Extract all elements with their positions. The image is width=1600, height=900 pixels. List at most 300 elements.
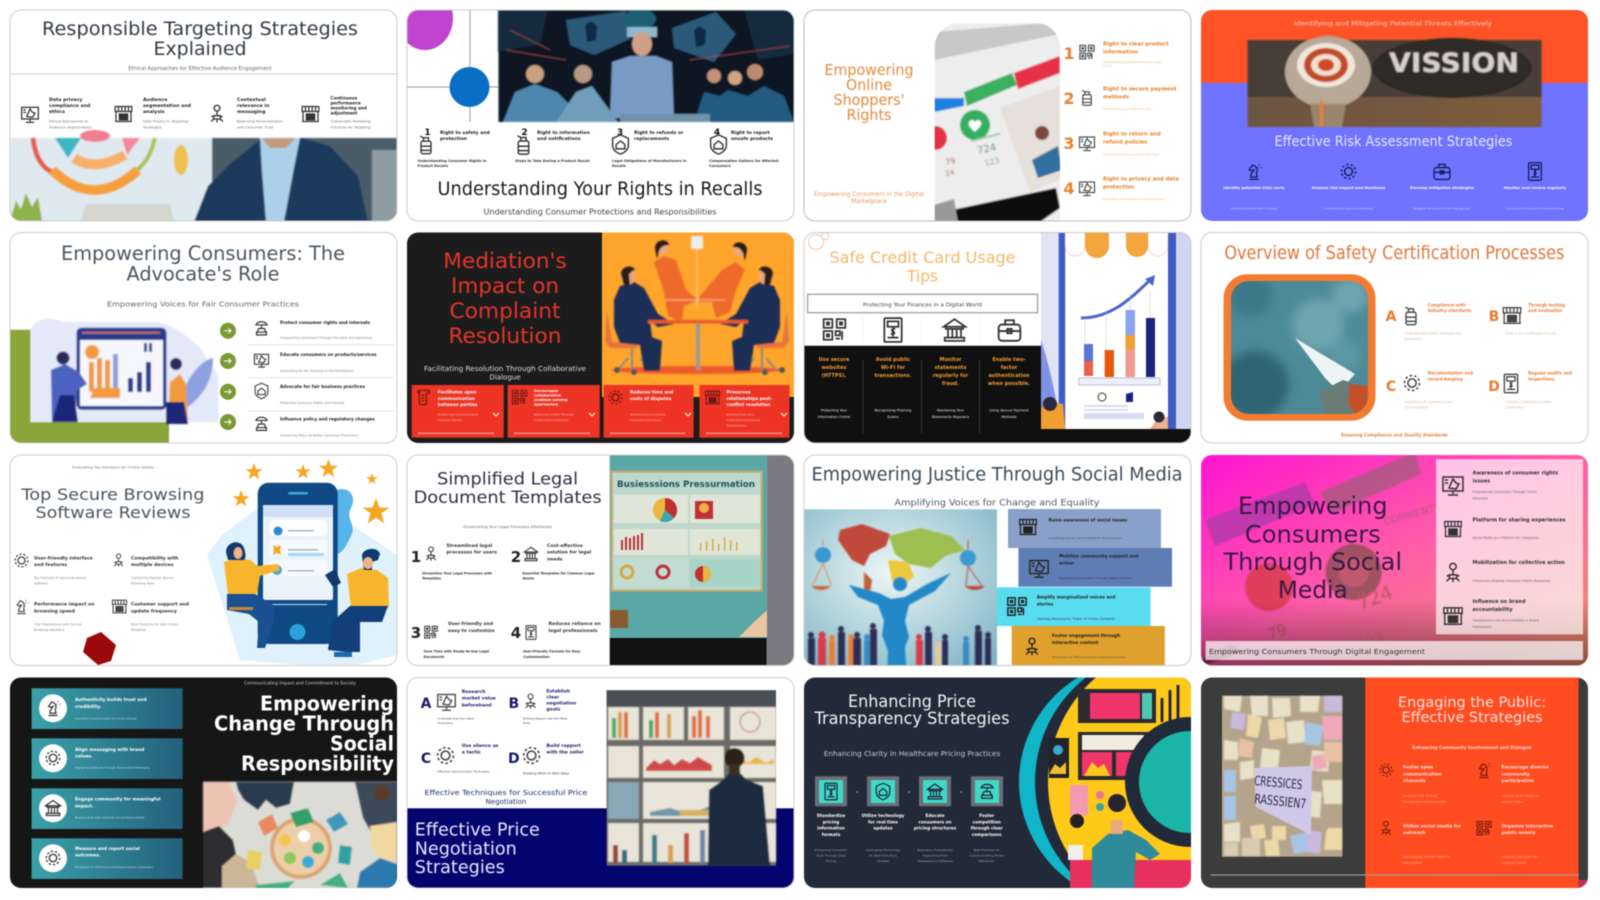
card: engage community: impact. — [75, 803, 94, 809]
item: right to safety — [418, 128, 490, 168]
card: align messaging: Engaging Audiences Through Responsible Messaging — [75, 766, 150, 770]
item B: goals — [546, 706, 561, 712]
subtitle box: Protecting Your Finances in a Digital World — [863, 302, 982, 308]
step: utilize technology: Leveraging Technology — [866, 848, 900, 852]
item B: testing: and evaluation — [1528, 308, 1562, 313]
footer bar: Empowering Consumers Through Digital Engagement — [1209, 648, 1425, 656]
item: right to information: Right to information — [537, 130, 590, 136]
card: encourages collaboration — [508, 385, 600, 438]
list item: influence policy: Influencing Policy for Better Consumer Protections — [280, 434, 358, 438]
item 1: Templates — [422, 576, 441, 580]
item: performance: browsing speed — [34, 608, 75, 614]
item 1 — [411, 543, 497, 580]
item: develop: Develop mitigation strategies — [1410, 185, 1475, 190]
background: blurred social metrics: 123 — [1356, 630, 1386, 654]
card: amplify voices: Amplify marginalized voices and — [1037, 594, 1115, 600]
card: encourages collaboration: Encourages — [534, 389, 559, 393]
item: right to refunds: replacements — [634, 136, 670, 142]
card: preserves relationships: Understanding Among — [726, 418, 760, 422]
card: reduces time and cost: Reduces time and — [630, 390, 673, 396]
item 4: 4 — [511, 624, 521, 642]
step: utilize technology: Utilize technology — [862, 813, 905, 818]
card: facilitates open communication — [412, 385, 504, 438]
title: Resolution — [448, 324, 562, 348]
step: standardize: Enhancing Consumer — [815, 848, 848, 852]
point: awareness: Advocacy — [1472, 496, 1488, 500]
card: foster engagement: Strategies for Effective Justice Campaigns Online — [1052, 655, 1126, 659]
card: engage community: Building Trust with Authentic Social Responsibility — [75, 816, 145, 820]
item: right to refunds: 3 — [617, 128, 623, 138]
item: diverse participation: Broader Reach — [1502, 800, 1524, 804]
item: foster communication: channels — [1403, 778, 1426, 784]
point: influence: Transparency and Accountability in Brand — [1472, 618, 1539, 622]
title: Media — [1278, 576, 1348, 604]
tip: secure websites: Protecting Your — [821, 408, 848, 412]
card: authenticity: Impactful Communication for Social Change — [75, 716, 137, 720]
item B: Party — [523, 721, 531, 725]
panel: Overview of Safety Certification Processes — [1201, 232, 1588, 444]
item: right to privacy: protection — [1103, 184, 1134, 190]
tip: two factor: Methods — [1002, 415, 1017, 419]
item 3 — [411, 621, 495, 659]
panel: Understanding Your Rights in Recalls — [397, 0, 794, 221]
item D — [508, 743, 585, 776]
item: right to safety: Right to safety and — [440, 130, 490, 136]
panel: Empowering Justice Through Social Media — [804, 455, 1191, 681]
list item: educate consumers: Advocating for Fair Practices in the Marketplace — [280, 369, 354, 373]
step: foster competition: comparisons — [972, 832, 1002, 837]
card: preserves relationships: conflict resolution — [726, 402, 770, 408]
item: right to report: unsafe products — [731, 136, 773, 142]
panel: Empowering Consumers: The Advocate's Role — [10, 232, 397, 444]
step: foster competition: competition — [973, 819, 1001, 824]
item: public events: Creating Interactive and — [1502, 855, 1539, 859]
subtitle: Dialogue — [489, 374, 521, 382]
title: Social — [330, 732, 394, 756]
title: Understanding Your Rights in Recalls — [438, 178, 762, 200]
tip: two factor: Using Secure Payment — [989, 408, 1029, 412]
card: amplify voices: stories — [1037, 602, 1054, 608]
list item: protect consumer rights — [220, 320, 373, 340]
title: Online — [846, 76, 892, 94]
step: foster competition: through clear — [971, 826, 1004, 830]
item: compatibility: Compatibility with — [131, 556, 179, 562]
item 1: Streamline Your Legal Processes with — [422, 572, 493, 576]
item 2: Essential Templates for Common Legal — [522, 572, 594, 576]
card: raise awareness — [1008, 509, 1161, 548]
item: continuous performance: Sustainable Marketing — [330, 120, 371, 124]
item: data privacy: ethics — [49, 109, 65, 115]
subtitle: Negotiation — [486, 798, 526, 806]
card: preserves relationships: Preserves — [726, 390, 751, 396]
item: audience segmentation: Data Privacy in Targeting — [143, 120, 188, 124]
item: continuous performance: adjustment — [330, 110, 357, 116]
image: businessman with chart — [10, 130, 397, 222]
item D: with the seller — [546, 750, 585, 756]
item D: audits: inspections — [1528, 377, 1555, 382]
card: facilitates open communication: Facilitates open — [438, 390, 476, 396]
card: preserves relationships — [700, 385, 790, 438]
step: foster competition: Best Practices for — [974, 848, 1001, 852]
step: utilize technology: for Real-Time Price — [869, 854, 897, 858]
item: compatibility: Comparing Popular Secure — [131, 576, 173, 580]
item D: audits: Certification — [1505, 406, 1524, 410]
card: measure outcomes: outcomes. — [75, 853, 101, 859]
item: support: Browsing — [131, 628, 146, 632]
item: right to privacy: Easy Returns and Refund Policies Explained — [1103, 197, 1164, 201]
item: audience segmentation — [115, 97, 191, 130]
item 4 — [511, 621, 601, 659]
title: Change Through — [214, 712, 394, 736]
card: reduces time and cost: Resolution Processes — [630, 418, 662, 422]
illustration: mediation meeting — [605, 236, 789, 375]
item: support: Customer support and — [131, 602, 189, 608]
point: platform: Platform for sharing experiences — [1472, 518, 1566, 524]
panel: Simplified Legal Document Templates — [407, 455, 795, 666]
card: preserves relationships: relationships post- — [726, 396, 772, 402]
panel: Top Secure Browsing Software Reviews — [10, 455, 397, 666]
subtitle: Empowering Voices for Fair Consumer Practices — [107, 300, 299, 308]
item C: a tactic — [462, 750, 481, 756]
item B: testing — [1489, 302, 1565, 336]
title: Empowering — [824, 61, 914, 79]
item: right to secure payment: Right to Privacy and Data Security — [1103, 107, 1152, 111]
image: social metrics phone: 24 — [945, 168, 956, 178]
title: Complaint — [450, 299, 560, 323]
tip: secure websites: Use secure — [819, 357, 850, 363]
step: standardize: Pricing — [826, 859, 836, 863]
card: align messaging — [32, 738, 183, 779]
decorative: red hexagon — [83, 632, 116, 665]
card: align messaging: values. — [75, 754, 93, 760]
step: educate: consumers on — [919, 819, 951, 824]
item: performance: Performance impact on — [34, 602, 94, 608]
point: influence: Influence on brand — [1472, 599, 1526, 605]
subtitle: Effective Techniques for Successful Price — [424, 789, 588, 797]
item: right to safety: Product Recalls — [418, 164, 448, 168]
title: Empowering Consumers: The — [61, 242, 345, 265]
item: interface: and features — [34, 562, 67, 568]
item 2: Needs — [522, 576, 534, 580]
subtitle: Amplifying Voices for Change and Equality — [894, 498, 1100, 508]
item B: testing: Through testing — [1528, 302, 1565, 308]
item D: D — [508, 751, 520, 767]
tip: monitor statements: fraud. — [942, 381, 959, 387]
image: orange framed pen — [1221, 273, 1376, 421]
item: foster communication: Building Trust Through — [1403, 794, 1438, 798]
panel: Effective Risk Assessment Strategies — [1201, 10, 1588, 221]
item: continuous performance: performance — [330, 100, 361, 106]
item: continuous performance: Practices for Targeting — [330, 126, 371, 130]
list item: educate consumers: Educate consumers on products/services — [280, 352, 377, 357]
item D: audits: Common Challenges in Safety — [1505, 400, 1552, 404]
item: right to report: Right to report — [731, 130, 771, 136]
item A: Understanding Your Value — [438, 716, 474, 720]
step: educate: pricing structures — [914, 826, 957, 830]
title: Shoppers' — [834, 91, 904, 109]
image: target in light bulb: VISSION — [1389, 48, 1519, 79]
card: measure outcomes: Measure and report social — [75, 846, 140, 852]
item: diverse participation: participation — [1502, 778, 1534, 784]
item: contextual relevance: and Consumer Trust — [237, 126, 274, 130]
step: standardize: Standardize — [817, 813, 845, 818]
item: right to secure payment — [1063, 86, 1177, 111]
item 4: User-Friendly Formats for Easy — [523, 650, 581, 654]
item: social media outreach: Discussions — [1403, 861, 1421, 865]
step: standardize: pricing — [823, 819, 839, 824]
item C: Use silence as — [462, 743, 499, 749]
item A: Research — [462, 689, 486, 695]
item: right to report: 4 — [714, 128, 720, 138]
subtitle: Facilitating Resolution Through Collaborative — [424, 365, 586, 373]
item: diverse participation: community — [1502, 771, 1530, 777]
subtitle: Enhancing Community Involvement and Dialogue — [1412, 745, 1532, 751]
item: contextual relevance — [211, 97, 283, 130]
tip: monitor statements: Monitoring Your — [937, 408, 965, 412]
item C: documentation: record-keeping — [1428, 377, 1463, 382]
item A: A — [421, 696, 432, 712]
title: Enhancing Price — [848, 692, 976, 711]
point: platform — [1445, 518, 1566, 540]
item C: Effective Communication Techniques — [438, 770, 490, 774]
item: analyze: Evaluating Risk Impact and Likelihood — [1324, 206, 1374, 210]
item A — [421, 689, 496, 725]
stars — [232, 459, 389, 523]
card: foster engagement — [1012, 626, 1165, 666]
background: blurred social metrics: COMMENTS — [1383, 502, 1442, 528]
tip: monitor statements: Statements Regularly — [932, 415, 969, 419]
item: continuous performance — [302, 96, 371, 130]
card: reduces time and cost: Streamlining Complaint — [630, 412, 666, 416]
tip: two factor: authentication — [988, 373, 1030, 379]
title: Mediation's — [443, 249, 567, 273]
item: diverse participation: Encourage diverse — [1502, 764, 1549, 770]
step: foster competition — [970, 776, 1004, 863]
item: right to safety: Understanding Consumer Rights in — [418, 159, 487, 163]
panel: Safe Credit Card Usage Tips — [804, 232, 1191, 444]
item 4: Reduces reliance on — [548, 621, 601, 627]
image: social metrics phone: 123 — [984, 156, 1000, 168]
card: preserves relationships: Building Trust and — [726, 412, 754, 416]
point: mobilization — [1447, 560, 1565, 583]
item: interface: Software — [34, 582, 48, 586]
background: blurred social metrics — [1201, 452, 1442, 666]
card: facilitates open communication: between parties — [438, 402, 478, 408]
title: Responsible Targeting Strategies — [42, 18, 358, 40]
title: Impact on — [451, 274, 559, 298]
item 2: needs — [547, 556, 563, 562]
step: standardize: formats — [822, 832, 841, 837]
image: social metrics phone — [923, 22, 1062, 222]
item: contextual relevance: relevance in — [237, 103, 269, 109]
item: public events: public events — [1502, 830, 1536, 836]
item: right to privacy: Right to privacy and data — [1103, 176, 1179, 182]
item: data privacy: Data privacy — [49, 97, 82, 103]
item: performance — [17, 600, 94, 632]
panel: Empowering Consumers Through Social Media — [1201, 452, 1588, 666]
title: Responsibility — [241, 752, 394, 776]
item B: B — [508, 696, 519, 712]
decorative shape: green L block — [10, 330, 169, 444]
tip: monitor statements: Monitor — [940, 357, 962, 363]
item 4: Customization — [523, 655, 550, 659]
step: standardize — [815, 776, 848, 863]
item: support — [112, 600, 189, 632]
item: right to return: refund policies — [1103, 140, 1147, 146]
item 3: 3 — [411, 624, 421, 642]
item: right to secure payment: methods — [1103, 94, 1129, 100]
item 2 — [511, 543, 594, 580]
item: public events: Inclusive Events — [1502, 861, 1527, 865]
item 2: solution for legal — [547, 550, 592, 556]
step: standardize: information — [817, 826, 845, 830]
item B: testing: B — [1489, 309, 1499, 325]
item A: compliance — [1386, 302, 1472, 341]
card: mobilize community — [1018, 548, 1172, 587]
step: utilize technology: for real-time — [868, 819, 898, 824]
card: encourages collaboration: Collaborative Solutions — [534, 418, 569, 422]
item: public events: Organize interactive — [1502, 823, 1553, 829]
point: influence: accountability — [1472, 607, 1513, 613]
decorative shape: blue circle — [450, 67, 490, 107]
tip: two factor — [988, 357, 1030, 419]
item: right to return: Right to return and — [1103, 132, 1161, 138]
title: Negotiation — [415, 838, 517, 860]
step: utilize technology — [862, 776, 905, 863]
item D: audits: D — [1488, 379, 1500, 395]
tip: secure websites: websites — [821, 365, 847, 371]
item: data privacy — [22, 97, 92, 130]
list item: advocate fair business: Advocate for fair business practices — [280, 384, 366, 389]
item: right to refunds: Recalls — [612, 164, 626, 168]
card: encourages collaboration: Reducing Conflict Through — [534, 412, 574, 416]
item: monitor: Monitor and review regularly — [1504, 185, 1567, 190]
illustration: people at tablet — [31, 319, 219, 424]
item A: Proposition — [438, 721, 454, 725]
item: right to refunds: Right to refunds or — [634, 130, 684, 136]
item: identify: Identifying Potential Risks in Projects — [1230, 206, 1279, 210]
item: audience segmentation: segmentation and — [143, 103, 191, 109]
card: foster engagement: interactive content — [1052, 640, 1098, 646]
item 2: Cost-effective — [547, 543, 583, 549]
item: audience segmentation: Audience — [143, 97, 167, 103]
item: analyze — [1312, 164, 1385, 210]
item: foster communication: communication — [1403, 771, 1442, 777]
item: develop: Mitigation Techniques for Risk Management — [1414, 206, 1470, 210]
point: mobilization: Influencers Shaping Consumer Rights Awareness — [1472, 579, 1551, 583]
subtitle: Marketplace — [851, 199, 887, 205]
image: wall of sticky notes: RASSSIEN7 — [1254, 792, 1307, 812]
item: right to information: 2 — [521, 128, 528, 138]
item B: Establish — [546, 688, 570, 694]
item 3: User-friendly and — [448, 621, 493, 627]
title: Effective Price — [415, 820, 540, 840]
item: right to privacy: 4 — [1063, 179, 1075, 198]
card: facilitates open communication: communication — [438, 396, 475, 402]
item: foster communication: Transparent Communication — [1402, 800, 1447, 804]
image: wall of sticky notes: CRESSICES — [1254, 774, 1303, 793]
item A: compliance: industry standards — [1428, 308, 1472, 313]
title: Advocate's Role — [126, 262, 280, 286]
item: right to refunds — [612, 128, 687, 168]
item: right to return: 3 — [1063, 134, 1075, 153]
step: educate: Transparency Initiatives — [916, 859, 953, 863]
step: educate: Supporting Price — [923, 854, 948, 858]
item C: documentation — [1386, 371, 1473, 410]
decorative shape: purple blob — [406, 10, 454, 51]
item: right to clear product information: 1 — [1063, 44, 1075, 63]
item 3: Save Time with Ready-to-Use Legal — [424, 650, 489, 654]
title: Effective Strategies — [1402, 710, 1542, 726]
item: audience segmentation: Strategies — [143, 126, 161, 130]
title: Empowering — [260, 692, 394, 716]
item: social media outreach — [1381, 822, 1462, 865]
tip: secure websites — [818, 357, 850, 419]
step: educate: Educate — [926, 813, 945, 818]
item: continuous performance: monitoring and — [330, 106, 367, 110]
image: world map and justice figure — [804, 509, 997, 681]
image: futuristic meeting — [498, 9, 794, 122]
item: right to clear product information: information — [1103, 50, 1138, 56]
list item: influence policy: Influence policy and regulatory changes — [280, 416, 375, 422]
item: right to clear product information: Right to clear product — [1103, 42, 1169, 48]
step: foster competition: Foster — [979, 813, 995, 818]
tip: secure websites: Information Online — [818, 415, 850, 419]
tip: monitor statements: regularly for — [933, 373, 969, 379]
point: influence: Interactions — [1472, 625, 1492, 629]
item: data privacy: Audience Segmentation — [49, 126, 92, 130]
item B: negotiation — [546, 700, 576, 706]
item B: clear — [546, 694, 560, 700]
item: compatibility: multiple devices — [131, 562, 174, 568]
title: Effective Risk Assessment Strategies — [1274, 134, 1512, 150]
tip: avoid public wifi: Scams — [887, 415, 899, 419]
point: influence — [1444, 599, 1539, 629]
item: right to privacy — [1063, 176, 1179, 201]
item D: audits: Regular audits and — [1528, 371, 1572, 376]
decorative: bubbles — [808, 232, 828, 250]
card: encourages collaboration: problem-solving — [534, 398, 568, 402]
step: foster competition: Effectively — [979, 859, 995, 863]
item: continuous performance: Continuous — [330, 96, 358, 100]
item: right to report: Compensation Options for Affected — [709, 159, 779, 163]
overline: Evaluating Top Solutions for Online Safety — [72, 464, 154, 470]
item: right to secure payment: 2 — [1063, 89, 1075, 108]
step: utilize technology: Updates — [877, 859, 890, 863]
icons row — [824, 318, 1020, 342]
item: monitor — [1504, 163, 1567, 210]
item B — [508, 688, 576, 725]
item: right to safety: protection — [440, 136, 467, 142]
subtitle: Enhancing Clarity in Healthcare Pricing Practices — [824, 749, 1001, 758]
item C: documentation: C — [1386, 379, 1396, 395]
item: public events — [1477, 821, 1553, 865]
item 1: processes for users — [446, 550, 497, 556]
item: foster communication: Foster open — [1403, 764, 1433, 770]
title: Consumers — [1245, 520, 1381, 548]
step: utilize technology: updates — [873, 826, 893, 830]
subtitle: Understanding Consumer Protections and Responsibilities — [484, 208, 717, 216]
title: Tips — [906, 266, 938, 286]
item: audience segmentation: analysis — [143, 109, 165, 115]
step: educate — [914, 776, 957, 863]
item: support: Best Practices for Safe Online — [131, 622, 178, 626]
step: foster competition: Communicating Prices — [970, 854, 1004, 858]
panel: Enhancing Price Transparency Strategies — [804, 644, 1324, 900]
tip: two factor: factor — [1001, 365, 1018, 371]
item: performance: Browsing Solutions — [34, 628, 65, 632]
panel: Responsible Targeting Strategies — [10, 10, 397, 222]
